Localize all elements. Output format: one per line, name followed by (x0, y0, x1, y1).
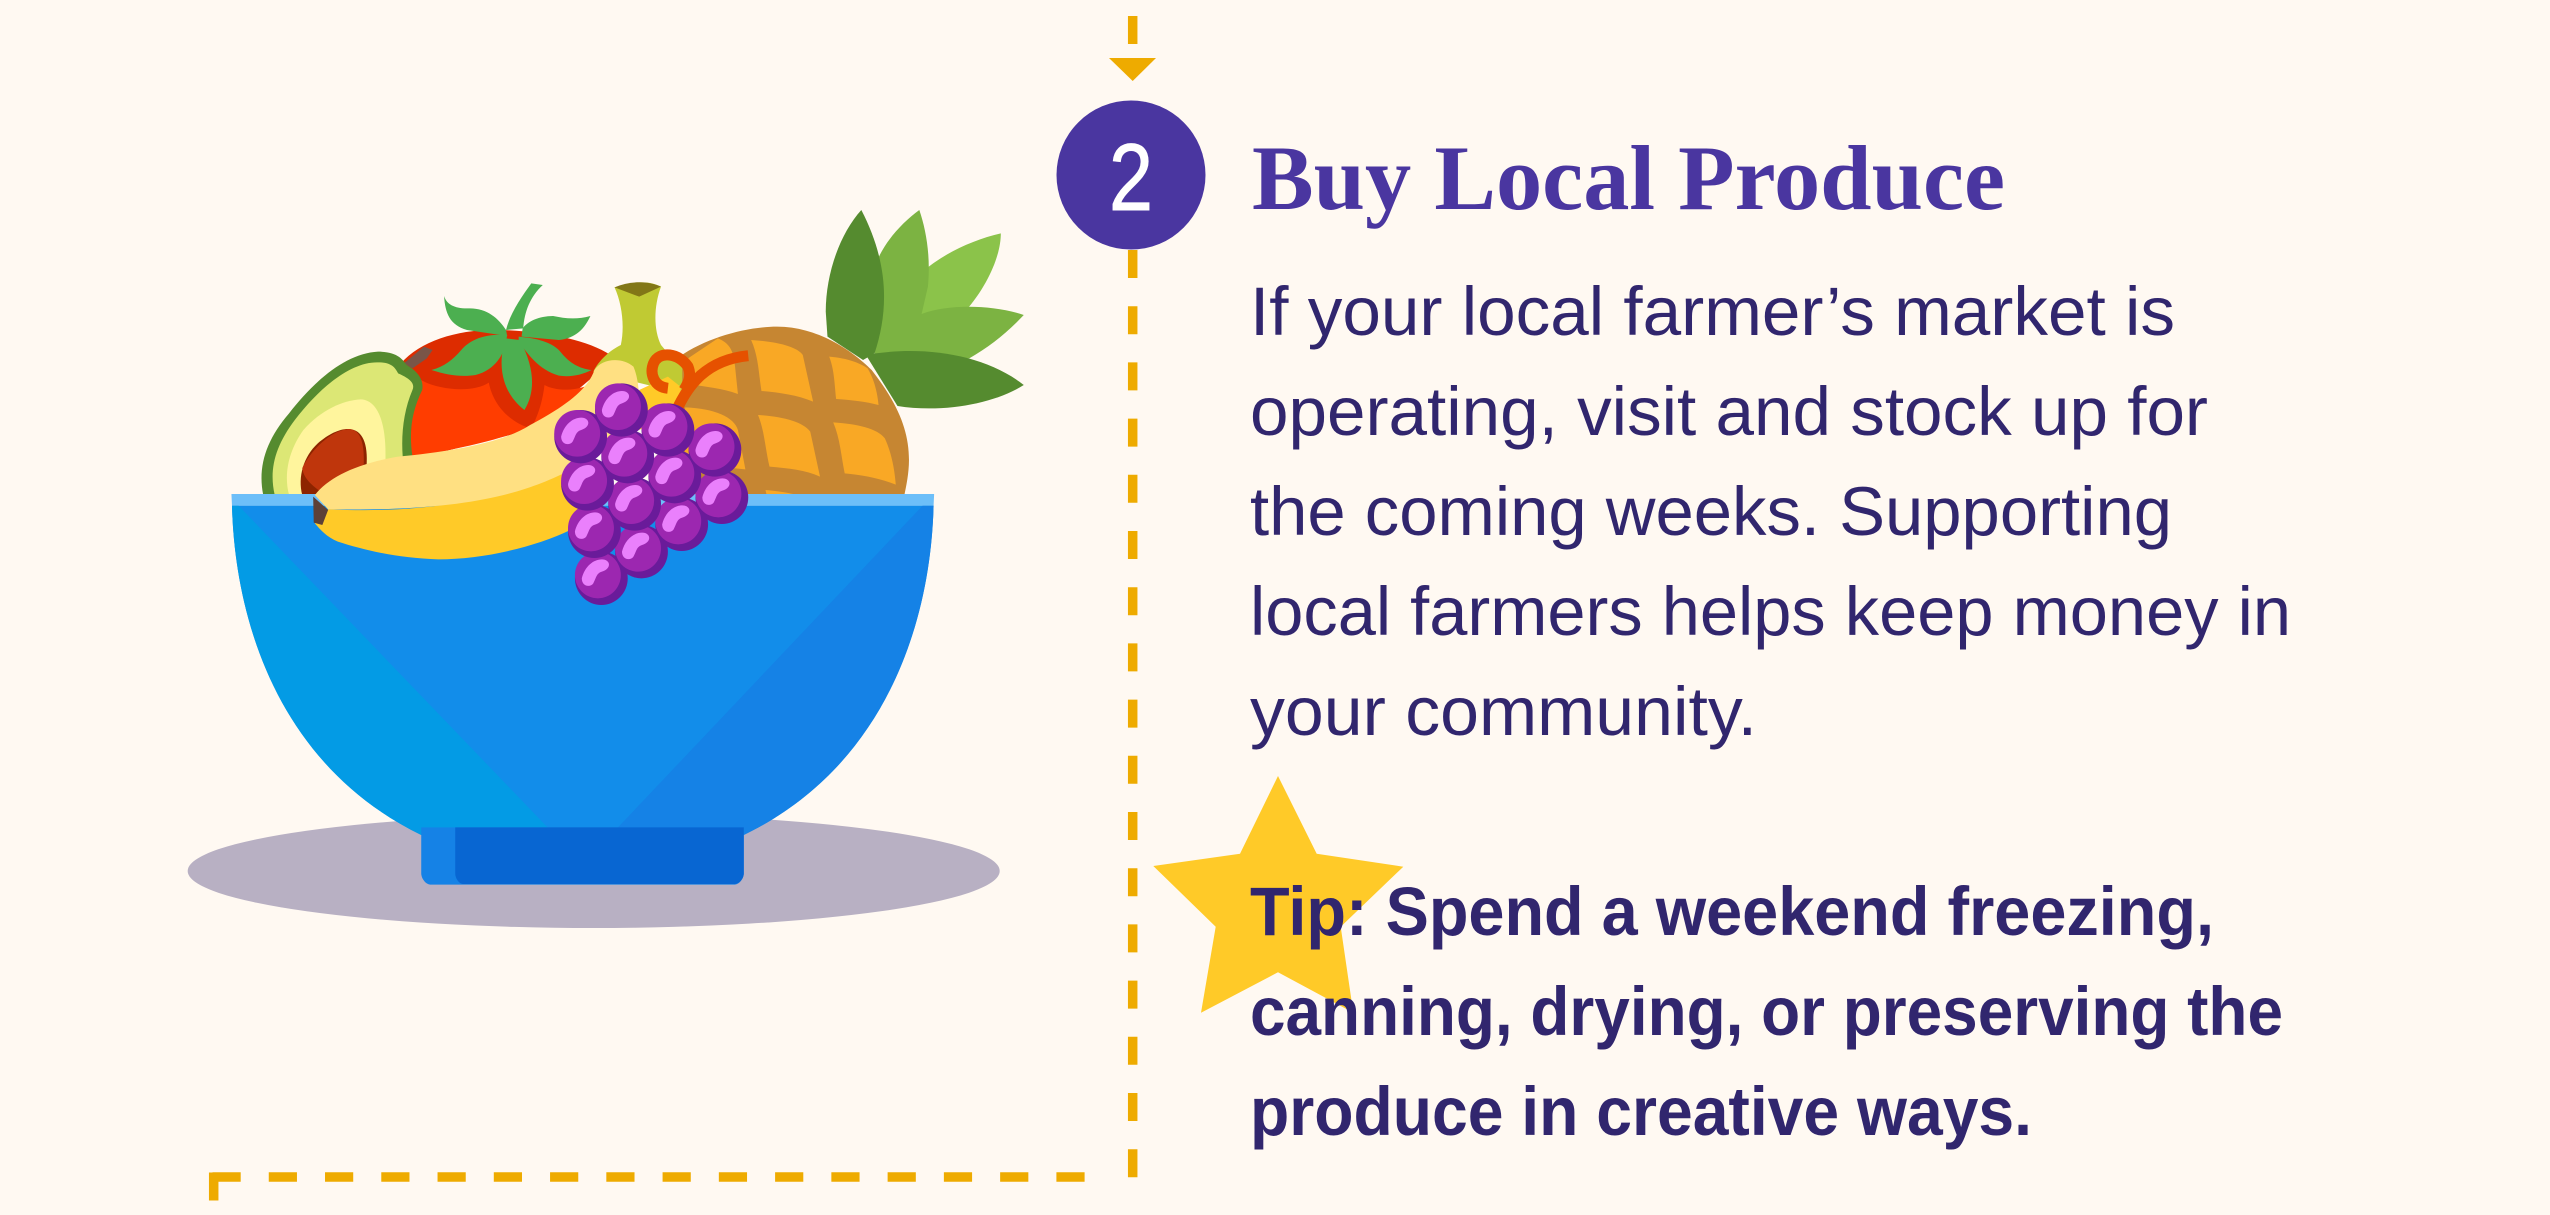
tip callout text (1250, 873, 2283, 1150)
pineapple (679, 210, 1024, 495)
grape vine tendril (652, 355, 748, 407)
avocado (262, 352, 423, 495)
tip callout text: canning, drying, or preserving the (1250, 973, 2283, 1050)
bowl (231, 494, 934, 885)
step number badge: 2 (1109, 125, 1153, 231)
step number badge (1056, 100, 1206, 250)
dashed connector path (212, 16, 1133, 1200)
arrow: pointing down to step 2 (1109, 58, 1156, 81)
bowl shadow (188, 814, 1000, 928)
tip callout text: produce in creative ways. (1250, 1073, 2032, 1150)
body paragraph: the coming weeks. Supporting (1250, 473, 2172, 550)
body paragraph: your community. (1250, 673, 1757, 750)
grapes (554, 383, 748, 605)
banana (313, 282, 682, 559)
heading: Buy Local Produce (1252, 127, 2005, 229)
icon: tip star (1153, 776, 1403, 1013)
body paragraph: operating, visit and stock up for (1250, 373, 2208, 450)
illustration: fruit bowl (188, 210, 1024, 928)
body paragraph: If your local farmer’s market is (1250, 273, 2175, 350)
body paragraph (1250, 273, 2291, 750)
tomato (401, 283, 610, 460)
body paragraph: local farmers helps keep money in (1250, 573, 2291, 650)
tip callout text: Tip: Spend a weekend freezing, (1250, 873, 2214, 950)
